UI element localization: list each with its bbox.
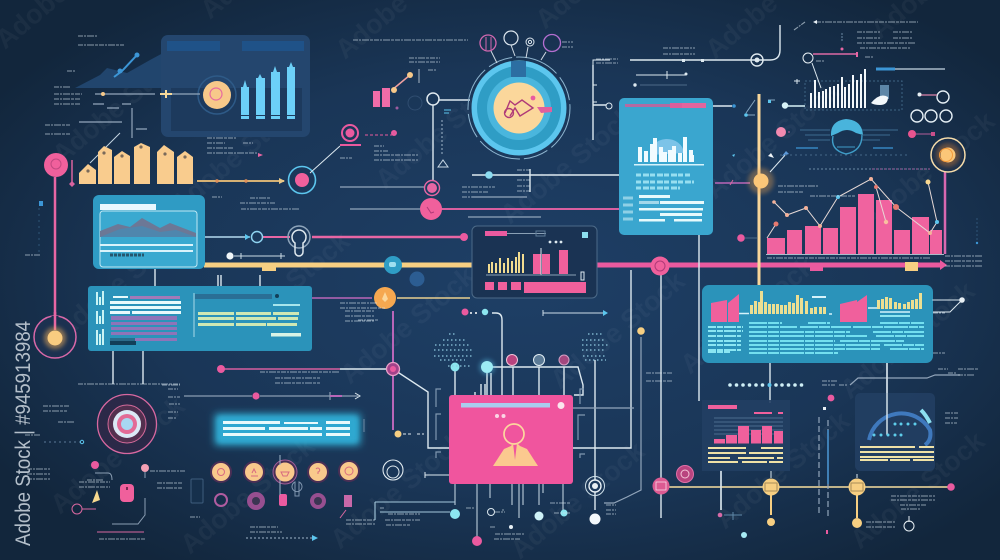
lone cyan and blue accents	[39, 201, 978, 252]
dots and rings around pink panel	[450, 308, 645, 546]
top-right connector slider	[633, 54, 763, 87]
small pink icons lower left	[72, 461, 182, 539]
watermark pattern: Adobe Stock	[710, 405, 856, 535]
watermark pattern: Adobe Stock	[855, 105, 1000, 235]
watermark pattern: Adobe Stock	[175, 430, 321, 560]
panel: top-left chart	[75, 35, 310, 137]
icon: target node	[288, 146, 340, 194]
small pink bar icon	[373, 69, 422, 110]
connectors around pink panel	[375, 313, 585, 538]
micro text around dial	[353, 40, 695, 197]
watermark pattern: Adobe Stock	[545, 265, 691, 395]
watermark pattern: Adobe Stock	[45, 390, 191, 520]
icons above dial	[480, 31, 560, 63]
micro text: under badge	[340, 146, 418, 160]
panel: teal mountain chart	[93, 195, 205, 269]
micro text bottom center	[340, 303, 672, 539]
watermark pattern: Adobe Stock	[835, 275, 981, 405]
rings row	[911, 91, 952, 122]
glowing orange node	[730, 151, 789, 194]
icon: glowing pink node	[34, 312, 76, 358]
dial: central circle	[468, 57, 570, 159]
icon: right of wide teal panel	[932, 297, 978, 375]
connector lines	[55, 25, 962, 518]
panel: center mini dashboard	[472, 226, 597, 298]
pink rule with micro text	[184, 365, 360, 400]
micro text left side	[25, 384, 200, 517]
watermark pattern: Adobe Stock	[210, 225, 356, 355]
icon: person	[493, 424, 538, 466]
icon: pink node top-left	[44, 153, 68, 177]
icon: white slider	[226, 252, 285, 260]
slider node	[468, 60, 612, 217]
dotted clouds	[434, 334, 608, 366]
stock id vertical label: Adobe Stock | #945913984	[12, 321, 35, 546]
icon row: orange circles	[211, 460, 359, 484]
watermark pattern: Adobe Stock	[165, 90, 311, 220]
bar chart in panel	[638, 137, 694, 162]
icon: blue ring and bulb	[205, 226, 310, 256]
tag bar chart	[79, 143, 193, 184]
watermark pattern: Adobe Stock	[675, 250, 821, 380]
right ring orange light	[931, 138, 965, 172]
nodes on main rails	[374, 256, 670, 438]
watermark pattern: Adobe Stock	[325, 425, 471, 555]
micro text right of dots	[822, 373, 957, 385]
watermark pattern: Adobe Stock	[495, 100, 641, 230]
ring node and triangle	[424, 93, 451, 196]
chart bars	[241, 62, 295, 119]
panel: dark pink bars	[702, 400, 790, 471]
watermark pattern: Adobe Stock	[335, 260, 481, 390]
dots row	[728, 383, 803, 387]
target circle	[44, 394, 156, 454]
arrow: right of center	[364, 310, 608, 432]
panel: wide teal bar table	[702, 285, 933, 363]
panel: glowing cyan list	[215, 414, 360, 445]
chart: white bars top right	[732, 20, 945, 117]
icon: pink round node	[420, 198, 468, 241]
panel: teal text table	[88, 286, 312, 351]
panel: dark radial gauge	[855, 363, 958, 471]
icon: headset	[776, 119, 935, 169]
timeline nodes	[652, 395, 955, 538]
micro text and rules: top left	[25, 36, 300, 255]
arrow: orange line to target	[197, 178, 285, 184]
watermark pattern: Adobe Stock	[370, 65, 516, 195]
yellow bar cluster	[488, 252, 524, 273]
panel: blue dashboard tall	[619, 98, 713, 235]
watermark pattern: Adobe Stock	[845, 425, 991, 555]
icon: pink profile badge	[340, 125, 396, 145]
panel: pink profile	[449, 395, 573, 484]
arrow: blue dashed bottom left	[246, 527, 318, 541]
watermark pattern: Adobe Stock	[47, 40, 193, 170]
watermark pattern: Adobe Stock	[700, 75, 846, 205]
line chart with pink bars	[737, 177, 982, 266]
icon row: purple circles	[191, 455, 352, 518]
watermark pattern: Adobe Stock	[50, 215, 196, 345]
